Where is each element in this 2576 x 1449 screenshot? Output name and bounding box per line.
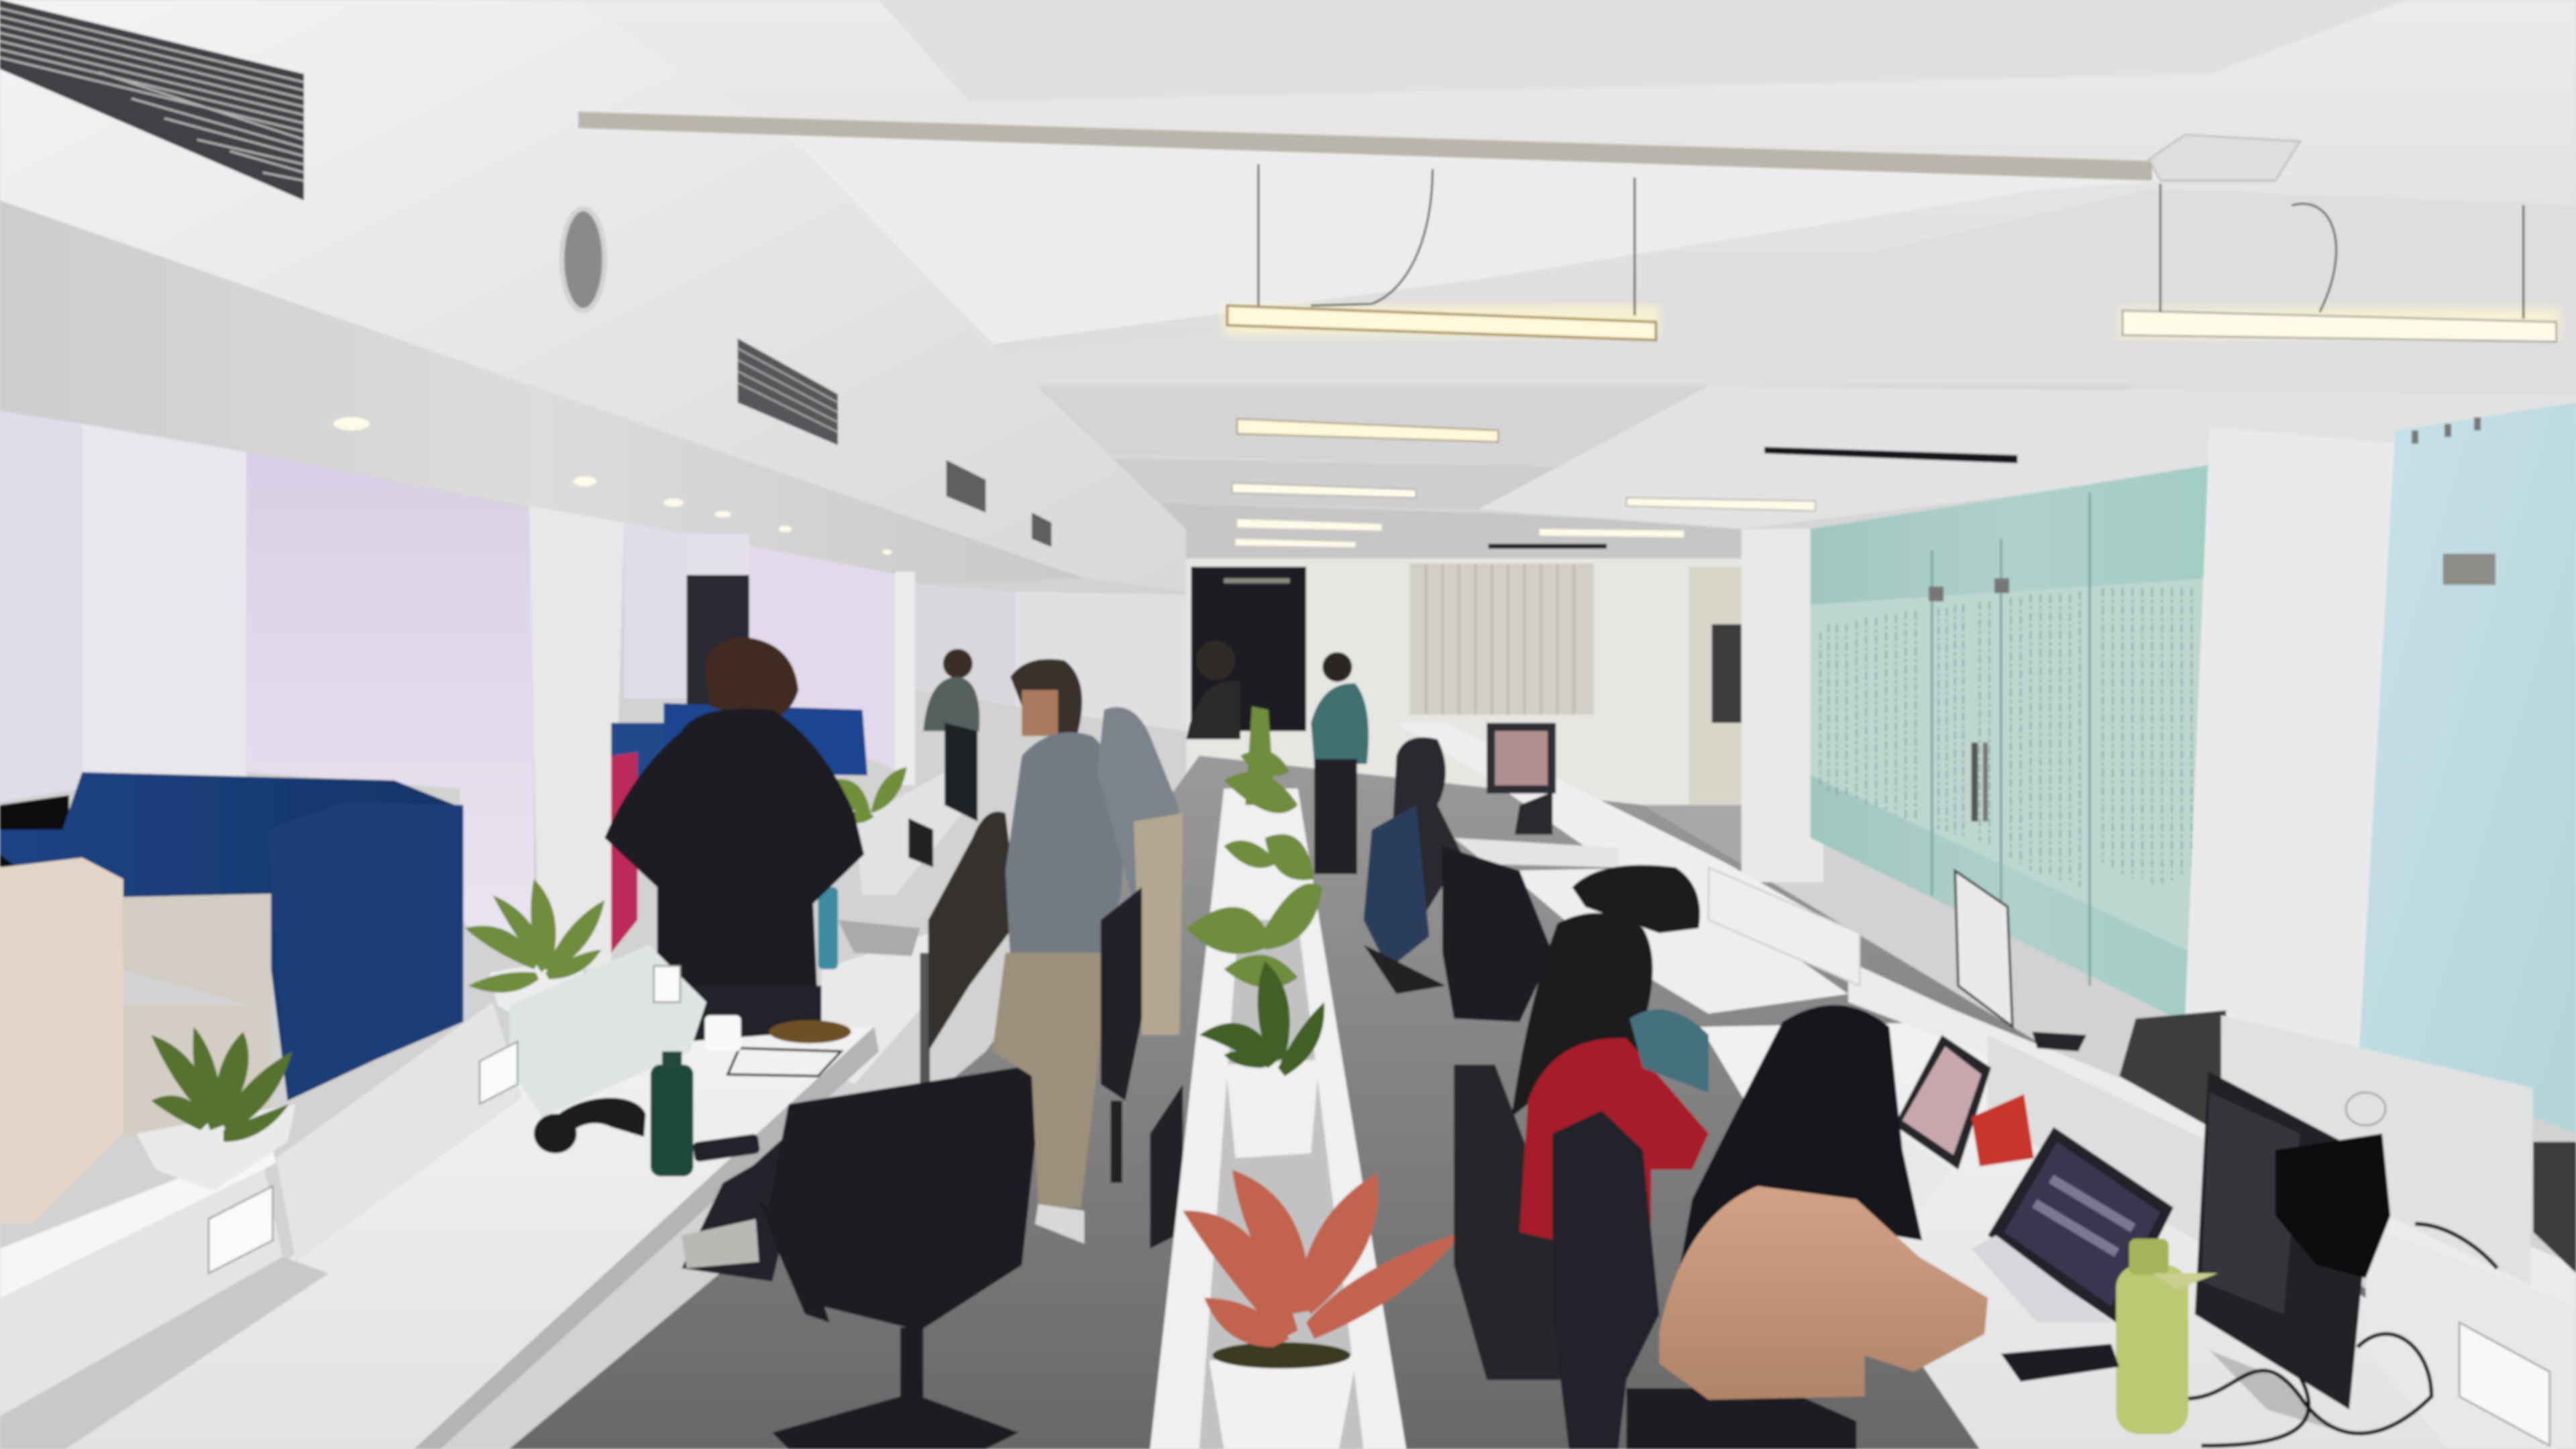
left lavender walls (0, 411, 1186, 969)
ventilation grilles small (738, 338, 1051, 547)
cables (2169, 1224, 2497, 1446)
central plants far (1186, 706, 1322, 988)
ventilation grille large (0, 0, 304, 201)
frosted glass partition with handwriting (1811, 465, 2210, 1035)
backpack on desk (1572, 865, 1700, 933)
blue sofa booths (0, 703, 867, 1224)
central plant with white pot (1199, 961, 1324, 1159)
laptop far (1881, 1035, 2034, 1208)
dell monitor back (2221, 1015, 2533, 1285)
legs and shoes below left desk (682, 1134, 808, 1281)
ceiling conduit pipe (578, 112, 2152, 180)
power sockets (209, 966, 680, 1273)
person: grey-shirt colleague at far left desk (923, 649, 979, 731)
floor (509, 756, 2576, 1449)
office chair left (759, 1065, 1040, 1449)
left desks back row (821, 772, 977, 1084)
soffit with spotlights (0, 201, 1084, 583)
round wall vent (562, 209, 604, 311)
black monitor with ornament (2195, 1071, 2390, 1430)
person: man in grey hoodie (992, 659, 1124, 1244)
right side far-edge person (2533, 1142, 2576, 1273)
desk bottle and phone (2001, 1239, 2218, 1434)
desk plant in pot (136, 1027, 296, 1191)
person: standing man in teal at back (1311, 652, 1368, 874)
left planter plant (465, 879, 604, 1027)
person: colleagues behind grey hoodie man (1097, 641, 1240, 1035)
left desk monitors and items (818, 723, 1018, 1051)
person: woman in red sweater with chair (1454, 913, 1709, 1380)
person: woman at back desk and chairs (1364, 737, 1552, 1022)
person: woman in tan sweater with chair (1552, 1005, 1988, 1449)
right main desk and dividers (1701, 867, 2576, 1449)
left upper wall (0, 0, 1186, 592)
person: man in black hoodie (604, 637, 864, 1199)
mesh chairs beside aisle (1101, 887, 1183, 1248)
right back desks (1397, 723, 2012, 1027)
right pillar (2185, 427, 2396, 1068)
dark desk and bag against glass (2032, 1010, 2226, 1134)
red-leaved aglaonema plant (1183, 1170, 1462, 1449)
plant on back left desk (830, 767, 907, 823)
left main desk (66, 1027, 879, 1449)
central planter box (1150, 789, 1406, 1449)
ceiling access point (2149, 135, 2300, 180)
left desk privacy dividers (0, 945, 706, 1449)
wall socket right (2459, 1322, 2550, 1446)
structural pillars left (529, 506, 915, 969)
desk items: headphones, bottle, notebook, mug, snack plate (534, 1015, 851, 1176)
ceiling (526, 0, 2576, 567)
right glass door (2359, 402, 2576, 1134)
pillar right of back wall (1741, 529, 1823, 882)
back wall (1186, 559, 1807, 871)
laptop near with dark screen (1972, 1127, 2174, 1322)
ceiling lights (1224, 164, 2560, 549)
